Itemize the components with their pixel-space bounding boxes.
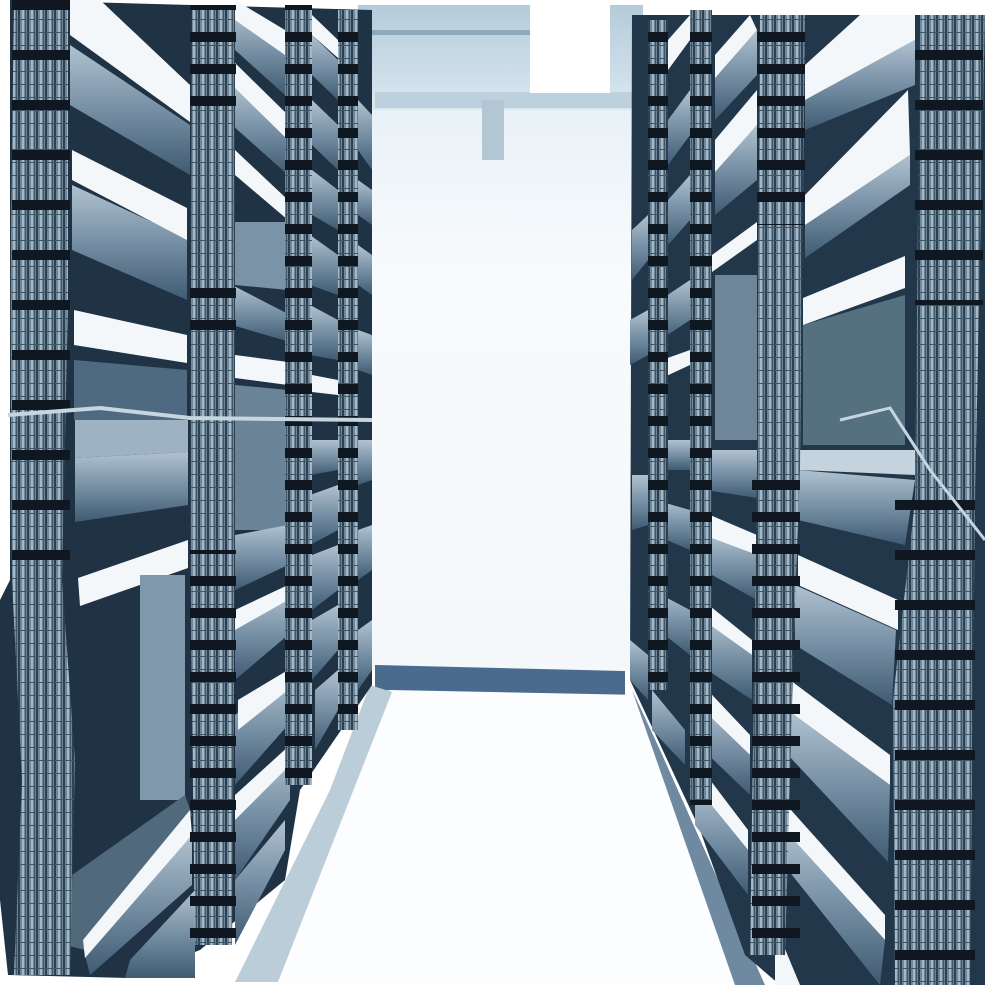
right bay D shelves <box>775 15 915 985</box>
right cable column C <box>750 15 805 955</box>
ceiling <box>358 5 643 160</box>
right cable column B <box>690 10 712 805</box>
right cable column A <box>648 20 668 690</box>
skylight <box>530 5 610 93</box>
pillar <box>140 575 185 800</box>
right bay A shelves <box>630 15 690 765</box>
left bay 3 shelves <box>310 15 338 750</box>
right bay C shelves <box>695 15 757 895</box>
left cable column 2 <box>190 5 236 945</box>
left cable column 1 <box>10 0 75 975</box>
horizontal loose wires left <box>8 408 372 420</box>
left cable column 4 <box>338 10 358 730</box>
left bay 2 shelves <box>232 0 290 945</box>
right cable column D <box>893 15 985 985</box>
left rack backdrop <box>0 0 372 978</box>
left bay 1 shelves <box>65 0 195 978</box>
loose wires right <box>840 408 985 540</box>
right rack backdrop <box>630 15 985 985</box>
back wall <box>370 105 640 670</box>
floor <box>280 690 740 985</box>
floor edge left <box>235 685 392 982</box>
floor edge right <box>632 690 765 985</box>
left cable column 3 <box>285 5 312 785</box>
left bay 4 shelves <box>358 100 372 690</box>
baseboard <box>375 665 625 695</box>
